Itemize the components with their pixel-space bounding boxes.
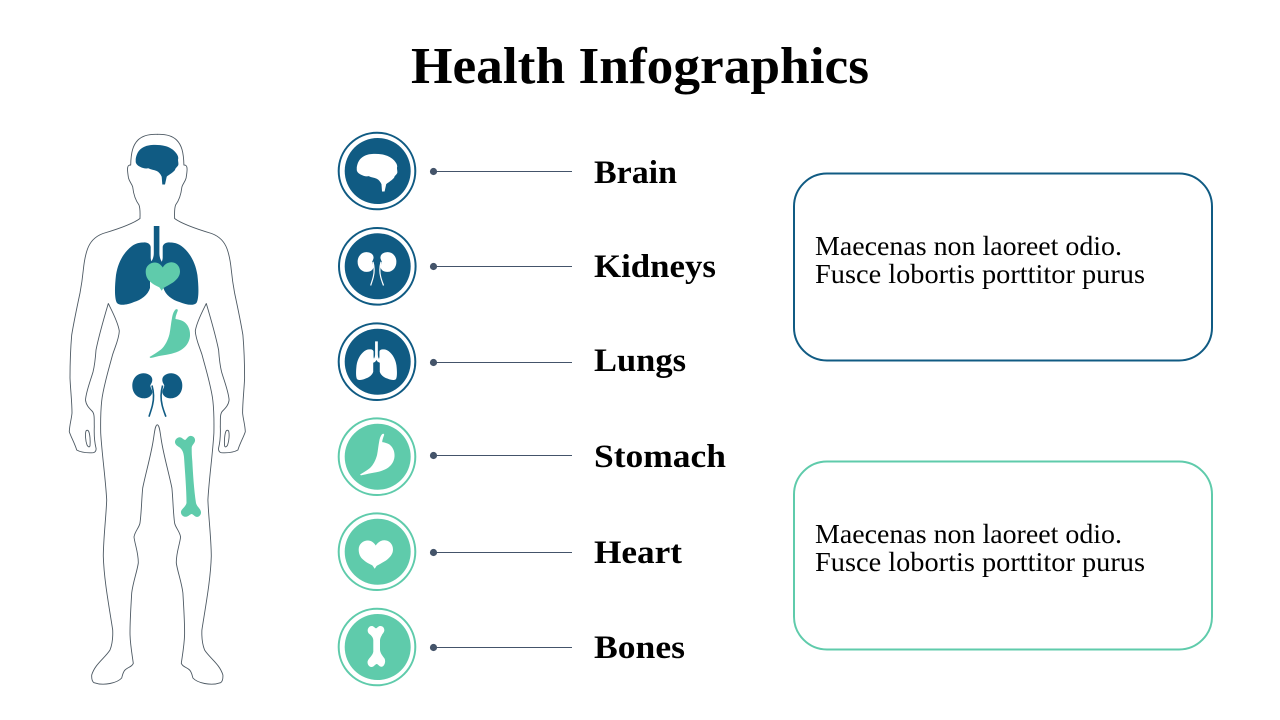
organ: brain bbox=[136, 145, 178, 184]
row: kidneys bbox=[339, 228, 716, 305]
row: stomach bbox=[339, 418, 726, 495]
label: Heart: Heart bbox=[594, 535, 682, 571]
text: blue box description: Fusce lobortis porttitor purus bbox=[815, 259, 1145, 289]
panel: blue text box bbox=[794, 174, 1212, 360]
organ: heart bbox=[146, 262, 180, 291]
row: brain bbox=[339, 133, 677, 209]
organ: bone bbox=[175, 436, 201, 517]
text: green box description: Maecenas non laoreet odio. bbox=[815, 519, 1122, 549]
organ: stomach bbox=[150, 309, 190, 358]
icon: stomach bbox=[339, 418, 415, 495]
row: bones bbox=[339, 609, 685, 685]
label: Brain: Brain bbox=[594, 155, 677, 191]
title: Health Infographics bbox=[411, 38, 869, 95]
connector bbox=[430, 263, 572, 270]
label: Kidneys: Kidneys bbox=[594, 249, 716, 285]
label: Bones: Bones bbox=[594, 630, 685, 666]
label: Lungs: Lungs bbox=[594, 343, 686, 379]
connector bbox=[430, 644, 572, 651]
human body figure with organs bbox=[69, 134, 245, 684]
icon: lungs bbox=[339, 323, 415, 400]
organ: kidneys bbox=[132, 373, 182, 417]
connector bbox=[430, 549, 572, 556]
connector bbox=[430, 452, 572, 459]
row: heart bbox=[339, 513, 682, 590]
icon: heart bbox=[339, 513, 415, 590]
icon: brain bbox=[339, 133, 415, 209]
icon: kidneys bbox=[339, 228, 416, 305]
organ: lungs bbox=[115, 226, 198, 305]
text: blue box description: Maecenas non laoreet odio. bbox=[815, 231, 1122, 261]
text: green box description: Fusce lobortis porttitor purus bbox=[815, 547, 1145, 577]
label: Stomach: Stomach bbox=[594, 439, 726, 475]
row: lungs bbox=[339, 323, 686, 400]
connector bbox=[430, 168, 572, 175]
panel: green text box bbox=[794, 462, 1212, 650]
icon: bone bbox=[339, 609, 415, 685]
connector bbox=[430, 359, 572, 366]
body outline bbox=[69, 134, 245, 684]
